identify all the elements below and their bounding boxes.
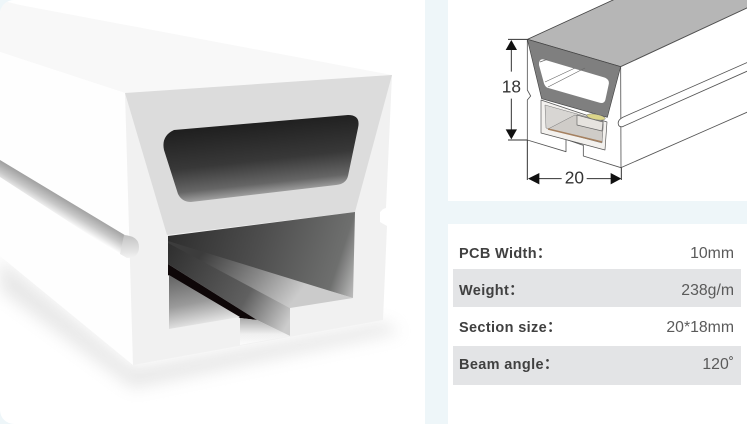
grey front trapezoid: [527, 39, 621, 117]
drawing: cross-section with dimensions: [502, 0, 747, 188]
dimension 20: [527, 140, 621, 188]
inner cavity: [545, 105, 603, 143]
row: beam angle: 120˚: [702, 356, 734, 373]
shadow: [0, 258, 400, 388]
row: section size: [459, 319, 734, 336]
lower cavity: [541, 100, 607, 150]
profile outline: [527, 7, 747, 168]
right notch: [380, 208, 394, 222]
panel: specification table: [448, 224, 747, 424]
row: PCB width: PCB Width：: [459, 246, 552, 262]
row: beam angle: Beam angle：: [459, 357, 559, 373]
row: weight: Weight：: [459, 283, 524, 299]
row: section size: 20*18mm: [666, 319, 734, 336]
dimension 18: 18: [502, 76, 521, 96]
right tab side: [168, 243, 290, 336]
row: beam angle: [453, 346, 741, 385]
front face: [125, 75, 392, 365]
PCB strip: [548, 129, 602, 142]
top face: [0, 0, 392, 93]
upper window: [163, 115, 359, 202]
lower opening: [168, 212, 355, 345]
left tab floor: [169, 275, 240, 329]
front face upper trapezoid: [125, 75, 392, 235]
LED chip: [577, 115, 603, 131]
back wall: [168, 212, 355, 298]
panel: product photo: [0, 0, 425, 424]
top surface: [527, 0, 747, 67]
right tab floor: [168, 241, 353, 308]
panel: dimension drawing: [448, 0, 747, 201]
groove end cap: [120, 235, 139, 258]
side groove: [618, 62, 747, 127]
row: PCB width: [459, 245, 734, 262]
row: weight: [453, 269, 741, 307]
upper window: [539, 59, 609, 103]
side face: [0, 52, 133, 365]
black gap: [168, 264, 257, 320]
side groove: [0, 160, 128, 257]
centre gap: [240, 318, 290, 345]
row: PCB width: 10mm: [690, 245, 734, 262]
dimension 18: [502, 39, 527, 140]
LED emitter: [586, 113, 606, 121]
inner lines in window: [540, 59, 585, 87]
PCB floor: [548, 115, 603, 142]
dimension 20: 20: [565, 168, 584, 188]
row: section size: Section size：: [459, 320, 562, 336]
row: weight: 238g/m: [681, 282, 734, 299]
